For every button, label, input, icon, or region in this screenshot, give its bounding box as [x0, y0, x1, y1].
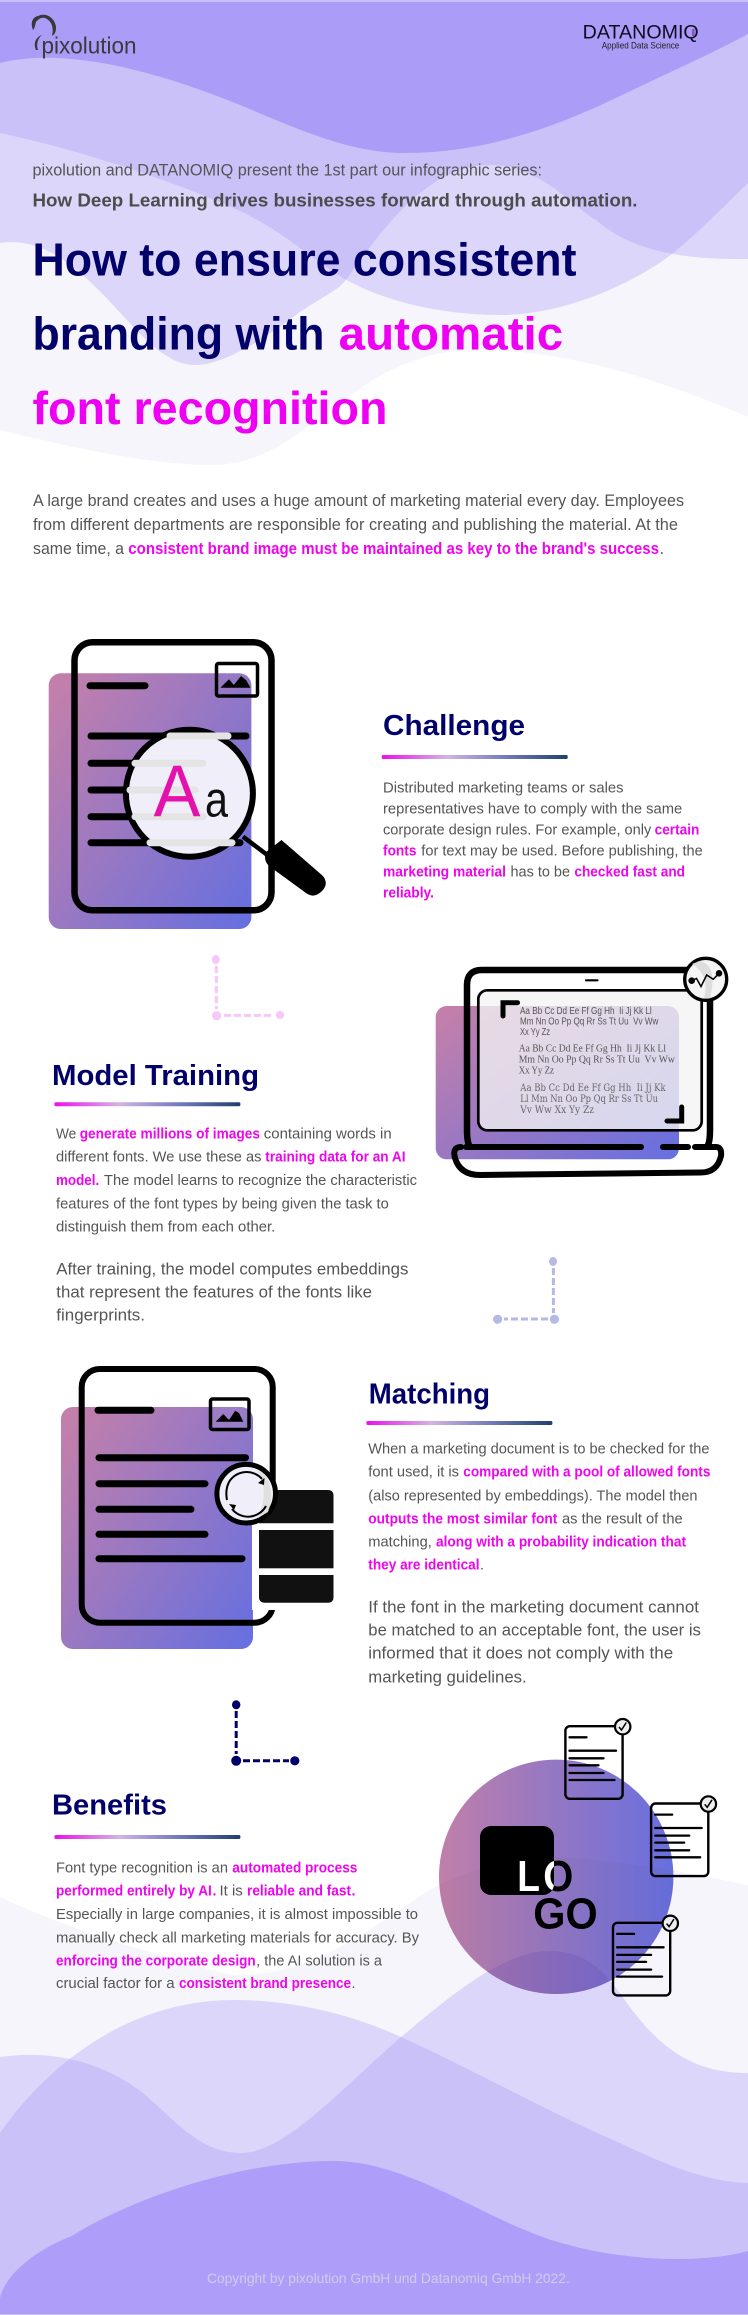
font samples: sans: [520, 1006, 659, 1038]
intro paragraph: from different departments are responsible for creating and publishing the material. At the: [33, 516, 678, 534]
text: benefits body: .: [352, 1976, 356, 1992]
text: benefits body: manually check all marketing materials for accuracy. By: [56, 1930, 420, 1946]
text: matching body: along with a probability indication that: [436, 1534, 686, 1550]
title: branding with: [32, 307, 324, 359]
font samples: slab: Ll Mm Nn Oo Pp Qq Rr Ss Tt Uu: [520, 1094, 658, 1105]
logo mark: O: [543, 1852, 573, 1901]
logo: DATANOMIQ: [583, 22, 699, 52]
logo: DATANOMIQ: Applied Data Science: [602, 41, 679, 52]
connector: navy dashed: [231, 1700, 299, 1766]
font samples: serif: [519, 1044, 675, 1077]
heading: challenge: Challenge: [383, 710, 525, 742]
text: challenge body: corporate design rules. For example, only: [383, 822, 652, 838]
font samples: sans: Mm Nn Oo Pp Qq Rr Ss Tt Uu Vv Ww: [520, 1016, 659, 1028]
intro paragraph: A large brand creates and uses a huge amount of marketing material every day. Employees: [33, 492, 684, 510]
logo mark: L: [517, 1852, 540, 1901]
text: challenge body: fonts: [383, 843, 416, 859]
logo: pixolution: [32, 15, 136, 58]
text: challenge body: certain: [655, 822, 699, 838]
text: embeddings note: fingerprints.: [56, 1307, 145, 1325]
text: benefits body: , the AI solution is a: [256, 1954, 382, 1970]
logo: DATANOMIQ: DATANOMIQ: [583, 22, 699, 43]
panel: matching: [366, 1378, 710, 1687]
icon: checked document 2: [651, 1796, 716, 1876]
text: matching body: matching,: [368, 1534, 432, 1550]
text: matching body: .: [480, 1557, 484, 1573]
intro paragraph: .: [660, 540, 664, 558]
text: challenge body: representatives have to comply with the same: [383, 801, 682, 817]
text: benefits body: reliable and fast: [247, 1883, 351, 1899]
text: model training body: distinguish them from each other.: [56, 1219, 275, 1235]
text: mismatch note: be matched to an acceptable font, the user is: [368, 1622, 701, 1640]
text: model training body: training data for an AI: [265, 1149, 406, 1165]
icon: document with magnifier: [49, 642, 326, 929]
text: challenge body: has to be: [510, 864, 570, 880]
text: mismatch note: [368, 1599, 701, 1687]
text: embeddings note: [56, 1261, 408, 1325]
text: matching body: compared with a pool of allowed fonts: [463, 1464, 710, 1480]
logo mark: O: [543, 1852, 573, 1901]
text: benefits body: Font type recognition is an: [56, 1860, 228, 1876]
text: challenge body: marketing material: [383, 864, 506, 880]
text: embeddings note: that represent the features of the fonts like: [56, 1284, 372, 1302]
logo: pixolution: pixolution: [42, 32, 136, 58]
icon: laptop with font samples: [436, 958, 727, 1175]
intro line: pixolution and DATANOMIQ present the 1st part our infographic series:: [32, 161, 542, 179]
icon: comparison lens: [217, 1464, 276, 1523]
font samples: slab: [519, 1083, 666, 1116]
title: [32, 233, 576, 434]
text: benefits body: .: [352, 1883, 356, 1899]
heading: matching: Matching: [369, 1378, 490, 1410]
text: challenge body: for text may be used. Before publishing, the: [421, 843, 703, 859]
text: model training body: different fonts. We use these as: [56, 1149, 262, 1165]
font samples: sans: Aa Bb Cc Dd Ee Ff Gg Hh Ii Jj Kk Ll: [520, 1006, 652, 1017]
text: matching body: outputs the most similar font: [368, 1511, 557, 1527]
text: benefits body: automated process: [232, 1860, 357, 1876]
font samples: sans: Xx Yy Zz: [520, 1027, 550, 1038]
intro paragraph: same time, a: [33, 540, 125, 558]
text: challenge body: Distributed marketing teams or sales: [383, 780, 624, 796]
icon: signal badge: [685, 958, 727, 1000]
background: bottom waves: [0, 1857, 748, 2315]
footer: copyright: Copyright by pixolution GmbH und Datanomiq GmbH 2022.: [207, 2270, 570, 2286]
icon: pixolution swirl: [32, 15, 56, 50]
icon: checked document 1: [565, 1719, 630, 1799]
text: matching body: as the result of the: [562, 1511, 683, 1527]
text: model training body: We: [56, 1126, 76, 1142]
text: challenge body: reliably.: [383, 885, 434, 901]
text: model training body: [56, 1126, 417, 1235]
text: benefits body: enforcing the corporate design: [56, 1954, 256, 1970]
font samples: slab: Vv Ww Xx Yy Zz: [519, 1105, 594, 1116]
panel: challenge: [382, 710, 703, 901]
text: benefits body: Especially in large companies, it is almost impossible to: [56, 1907, 418, 1923]
icon: document matching: [61, 1369, 336, 1649]
text: model training body: The model learns to recognize the characteristic: [104, 1173, 417, 1189]
background: top waves: [0, 0, 748, 465]
text: benefits body: consistent brand presence: [179, 1976, 351, 1992]
text: matching body: they are identical: [368, 1557, 480, 1573]
icon: checked document 3: [613, 1916, 678, 1995]
text: mismatch note: marketing guidelines.: [368, 1669, 527, 1687]
text: benefits body: [56, 1860, 420, 1992]
intro paragraph: consistent brand image must be maintained as key to the brand's success: [128, 540, 659, 558]
title: font recognition: [32, 382, 388, 434]
intro paragraph: [33, 492, 684, 558]
font samples: slab: Aa Bb Cc Dd Ee Ff Gg Hh Ii Jj Kk: [519, 1083, 666, 1094]
text: matching body: [368, 1441, 710, 1573]
font samples: serif: Aa Bb Cc Dd Ee Ff Gg Hh Ii Jj Kk Ll: [519, 1044, 666, 1055]
logo mark: GO: [533, 1889, 598, 1938]
text: mismatch note: If the font in the marketing document cannot: [368, 1599, 699, 1617]
text: matching body: When a marketing document is to be checked for the: [368, 1441, 710, 1457]
text: model training body: generate millions of images: [80, 1126, 260, 1142]
title: automatic: [339, 307, 563, 359]
icon: document with magnifier: a: [205, 772, 228, 828]
text: benefits body: crucial factor for a: [56, 1976, 175, 1992]
icon: logo with checked documents: [439, 1718, 718, 1997]
title: How to ensure consistent: [32, 233, 576, 285]
connector: pink dashed: [212, 955, 284, 1020]
panel: model training: [52, 1060, 417, 1325]
text: model training body: model.: [56, 1173, 99, 1189]
table: font pool: [259, 1490, 334, 1603]
text: model training body: features of the font types by being given the task to: [56, 1196, 389, 1212]
text: challenge body: [383, 780, 703, 901]
text: matching body: (also represented by embeddings). The model then: [368, 1488, 698, 1504]
series subtitle: How Deep Learning drives businesses forward through automation.: [32, 190, 637, 211]
text: benefits body: .: [212, 1883, 216, 1899]
font samples: serif: Mm Nn Oo Pp Qq Rr Ss Tt Uu Vv Ww: [519, 1055, 675, 1066]
connector: blue dashed: [493, 1257, 559, 1324]
heading: model training: Model Training: [52, 1060, 259, 1092]
text: benefits body: performed entirely by AI: [56, 1883, 212, 1899]
heading: benefits: Benefits: [52, 1790, 167, 1822]
text: challenge body: checked fast and: [574, 864, 685, 880]
icon: document with magnifier: A: [154, 752, 201, 833]
text: embeddings note: After training, the model computes embeddings: [56, 1261, 408, 1279]
font samples: serif: Xx Yy Zz: [519, 1066, 554, 1077]
logo mark: [480, 1826, 598, 1938]
text: matching body: font used, it is: [368, 1464, 459, 1480]
panel: benefits: [52, 1790, 420, 1992]
text: mismatch note: informed that it does not comply with the: [368, 1645, 673, 1663]
text: benefits body: It is: [220, 1883, 243, 1899]
text: model training body: containing words in: [264, 1126, 392, 1142]
